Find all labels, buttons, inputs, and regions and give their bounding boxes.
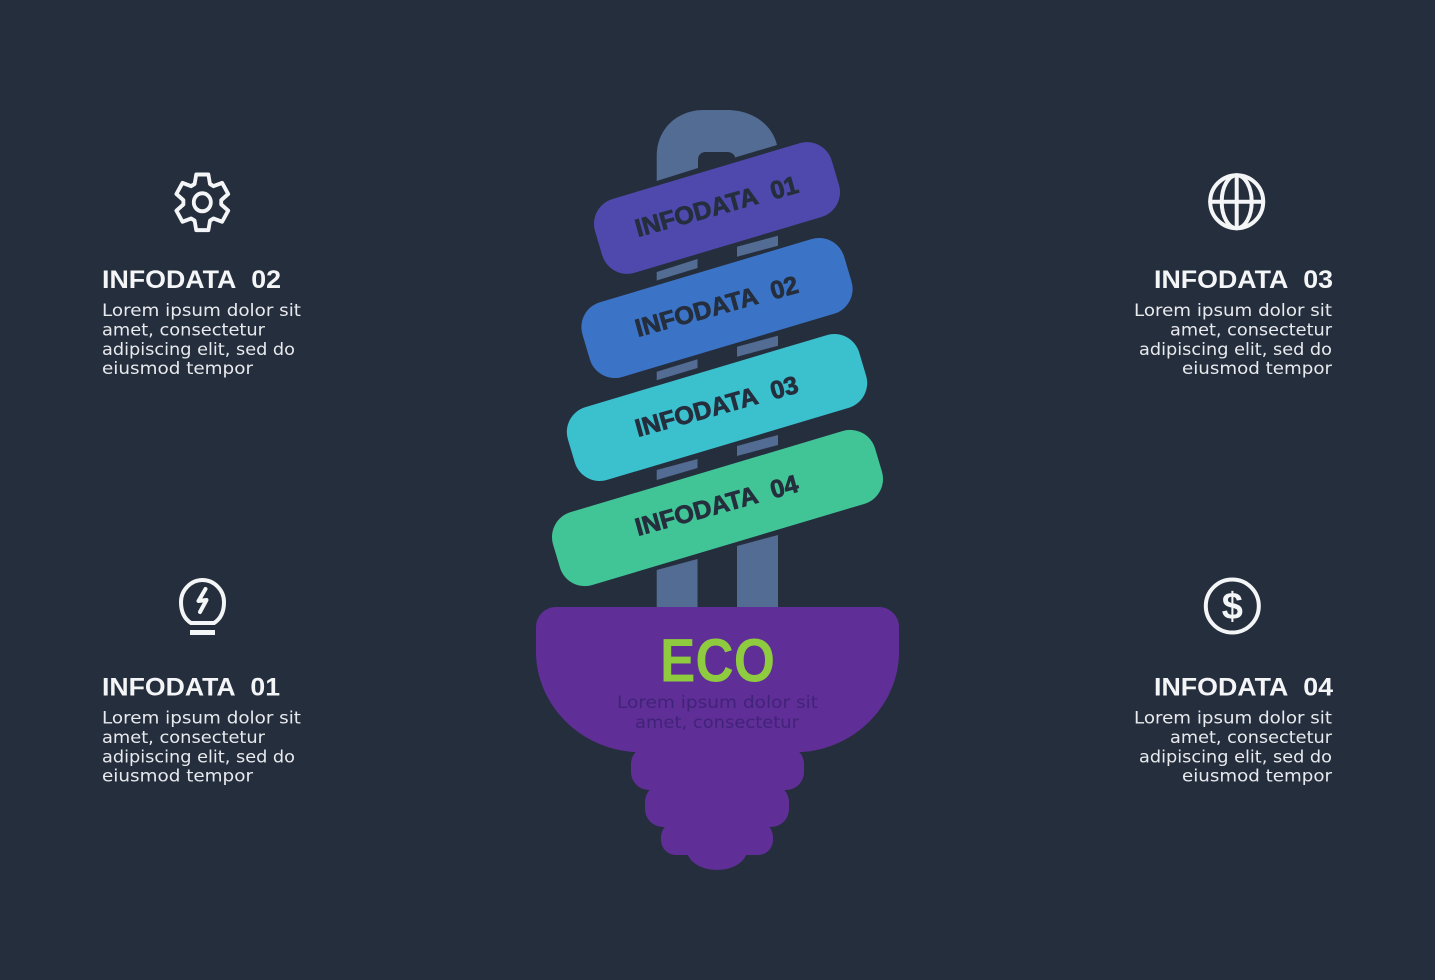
spiral tube segments xyxy=(657,110,778,608)
body text: amet, consectetur xyxy=(102,320,265,340)
body text xyxy=(1134,301,1332,379)
heading: INFODATA 03 xyxy=(1154,266,1333,294)
body text: Lorem ipsum dolor sit xyxy=(1134,301,1332,321)
body text xyxy=(1134,708,1332,786)
band: infodata 04 xyxy=(546,424,889,592)
band: infodata 02 xyxy=(575,232,859,384)
band: infodata 03: INFODATA 03 xyxy=(632,371,801,443)
body text: Lorem ipsum dolor sit xyxy=(1134,708,1332,728)
body text: amet, consectetur xyxy=(1170,728,1332,748)
bulb base xyxy=(536,607,899,870)
heading: INFODATA 04 xyxy=(1154,674,1333,702)
body text: eiusmod tempor xyxy=(1182,359,1332,379)
icon: globe xyxy=(1210,175,1263,228)
icon: dollar coin xyxy=(1206,580,1259,632)
heading: INFODATA 01 xyxy=(102,674,280,702)
body text xyxy=(102,301,301,379)
body text: adipiscing elit, sed do xyxy=(102,340,295,360)
band: infodata 01: INFODATA 01 xyxy=(632,171,802,243)
band: infodata 02: INFODATA 02 xyxy=(632,271,801,343)
body text: adipiscing elit, sed do xyxy=(1139,340,1332,360)
band: infodata 04: INFODATA 04 xyxy=(632,470,802,542)
body text xyxy=(102,708,301,786)
body text: eiusmod tempor xyxy=(1182,766,1332,786)
body text: amet, consectetur xyxy=(1170,320,1332,340)
eco title: ECO xyxy=(660,627,775,695)
band: infodata 03 xyxy=(560,328,874,487)
heading: INFODATA 02 xyxy=(102,266,281,294)
body text: adipiscing elit, sed do xyxy=(1139,748,1332,768)
body text: Lorem ipsum dolor sit xyxy=(102,708,301,728)
band: infodata 01 xyxy=(588,136,846,280)
body text: eiusmod tempor xyxy=(102,359,253,379)
light bulb illustration xyxy=(536,110,899,870)
body text: eiusmod tempor xyxy=(102,766,253,786)
icon: dollar coin: $ xyxy=(1222,586,1243,628)
eco description: Lorem ipsum dolor sit xyxy=(617,693,818,713)
body text: amet, consectetur xyxy=(102,728,265,748)
body text: Lorem ipsum dolor sit xyxy=(102,301,301,321)
icon: gear xyxy=(176,174,228,230)
panel: infodata 02 xyxy=(102,174,301,379)
panel: infodata 01 xyxy=(102,580,301,786)
icon: light bulb with bolt xyxy=(181,580,224,632)
panel: infodata 03 xyxy=(1134,175,1333,379)
eco description xyxy=(617,693,818,733)
eco description: amet, consectetur xyxy=(635,713,799,733)
panel: infodata 04 xyxy=(1134,580,1333,786)
body text: adipiscing elit, sed do xyxy=(102,748,295,768)
